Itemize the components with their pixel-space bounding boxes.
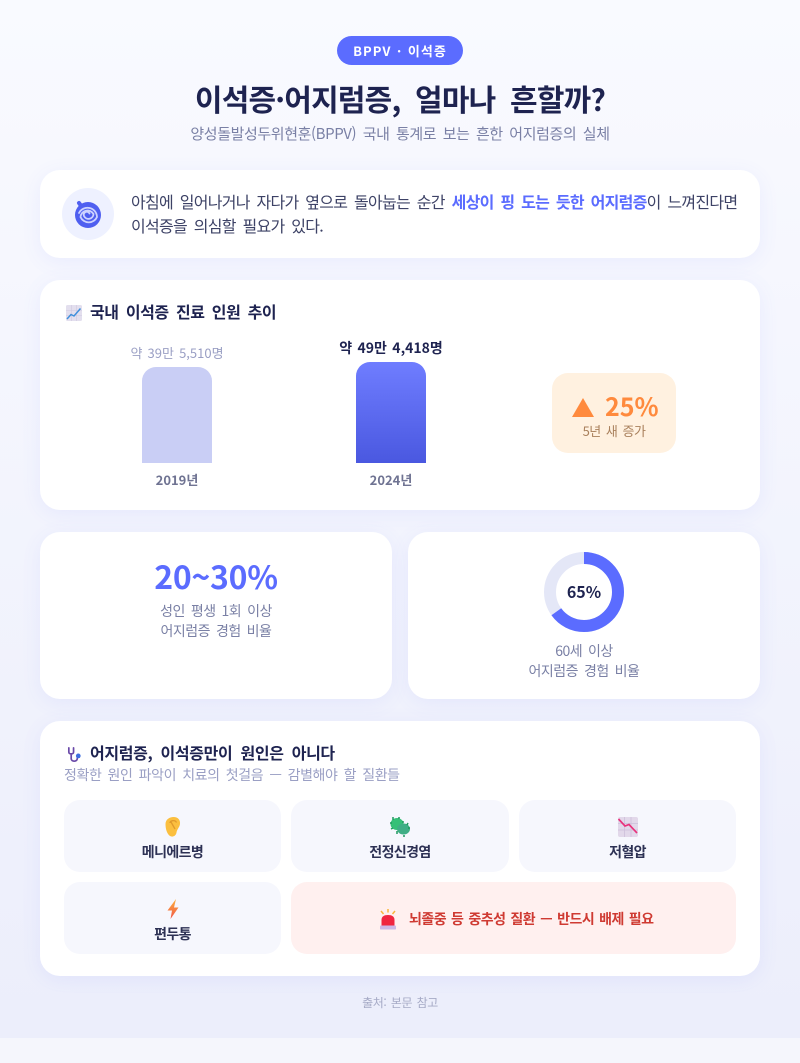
- icon: lightning: [168, 899, 178, 919]
- icon: stethoscope: [68, 747, 81, 762]
- 2019 label: 2019년: [156, 470, 198, 489]
- icon: microbe: [390, 817, 410, 837]
- 2019 bar: [142, 367, 212, 463]
- intro text: 이석증을 의심할 필요가 있다.: [131, 213, 323, 237]
- label: 저혈압: [609, 842, 646, 862]
- panel: patient trend: [40, 280, 760, 510]
- increase value: 25%: [605, 388, 659, 424]
- stat caption: 60세 이상: [555, 641, 613, 661]
- label: 편두통: [154, 924, 191, 944]
- card: Meniere: [64, 800, 281, 872]
- intro text: [131, 189, 737, 237]
- panel: other causes: [40, 721, 760, 976]
- subtitle: 양성돌발성두위현훈(BPPV) 국내 통계로 보는 흔한 어지럼증의 실체: [190, 123, 610, 144]
- stat caption: 성인 평생 1회 이상: [160, 601, 272, 621]
- 2019 value: 약 39만 5,510명: [130, 343, 224, 362]
- 2024 bar: [356, 362, 426, 463]
- big number: 20~30%: [154, 553, 278, 599]
- warning text: 뇌졸중 등 중추성 질환 — 반드시 배제 필요: [409, 909, 654, 929]
- 2024 label: 2024년: [370, 470, 412, 489]
- icon: declining chart: [618, 817, 638, 837]
- section subtitle: 정확한 원인 파악이 치료의 첫걸음 — 감별해야 할 질환들: [64, 765, 400, 785]
- stat caption: 어지럼증 경험 비율: [161, 621, 271, 641]
- increase caption: 5년 새 증가: [583, 421, 645, 440]
- badge: [337, 36, 463, 65]
- badge: BPPV · 이석증: [353, 41, 447, 60]
- callout: 25% increase: [552, 373, 676, 453]
- panel: senior stat: [408, 532, 760, 699]
- panel: intro: [40, 170, 760, 258]
- title: 이석증·어지럼증, 얼마나 흔할까?: [195, 76, 605, 120]
- stat caption: 어지럼증 경험 비율: [529, 661, 639, 681]
- section heading: 어지럼증, 이석증만이 원인은 아니다: [90, 740, 335, 764]
- icon: ear: [166, 817, 180, 837]
- icon: up triangle: [572, 398, 594, 417]
- icon: chart: [66, 305, 82, 321]
- bar chart: [130, 338, 443, 489]
- intro text: 아침에 일어나거나 자다가 옆으로 돌아눕는 순간 세상이 핑 도는 듯한 어지럼증이 느껴진다면: [131, 189, 737, 213]
- card: hypotension: [519, 800, 736, 872]
- section heading: 국내 이석증 진료 인원 추이: [90, 299, 276, 323]
- donut chart: [544, 552, 624, 632]
- icon: siren: [380, 909, 396, 930]
- donut chart: 65%: [567, 579, 601, 603]
- callout: stroke warning: [291, 882, 736, 954]
- label: 메니에르병: [142, 842, 203, 862]
- icon: dizzy spiral: [62, 188, 114, 240]
- source note: 출처: 본문 참고: [362, 994, 438, 1011]
- label: 전정신경염: [369, 842, 431, 862]
- card: vestibular neuritis: [291, 800, 509, 872]
- card: migraine: [64, 882, 281, 954]
- 2024 value: 약 49만 4,418명: [339, 338, 443, 358]
- stat caption: [529, 641, 640, 681]
- panel: adult stat: [40, 532, 392, 699]
- stat caption: [160, 601, 272, 641]
